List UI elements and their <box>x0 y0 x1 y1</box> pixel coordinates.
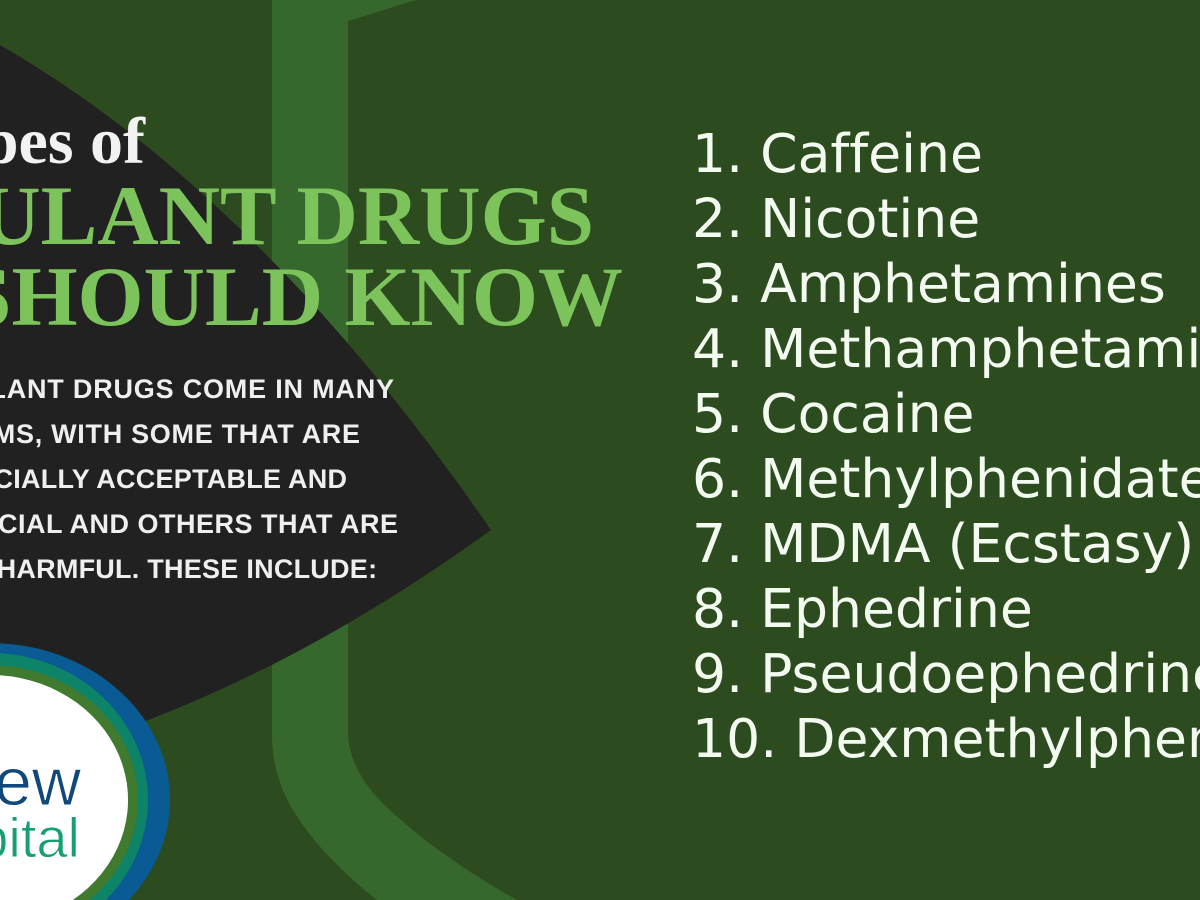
intro text block: HARMFUL. THESE INCLUDE: <box>0 554 377 584</box>
numbered list of drugs <box>692 122 1200 770</box>
logo wordmark <box>0 769 80 857</box>
background curved band <box>272 0 517 900</box>
intro text block <box>0 374 398 584</box>
title <box>0 116 622 326</box>
numbered list of drugs: 8. Ephedrine <box>692 577 1033 640</box>
black fan panel <box>0 45 491 722</box>
numbered list of drugs: 2. Nicotine <box>692 187 980 250</box>
numbered list of drugs: 5. Cocaine <box>692 382 975 445</box>
numbered list of drugs: 3. Amphetamines <box>692 252 1166 315</box>
numbered list of drugs: 6. Methylphenidate <box>692 447 1200 510</box>
numbered list of drugs: 1. Caffeine <box>692 122 983 185</box>
numbered list of drugs: 7. MDMA (Ecstasy) <box>692 512 1194 575</box>
hospital logo <box>0 643 170 900</box>
